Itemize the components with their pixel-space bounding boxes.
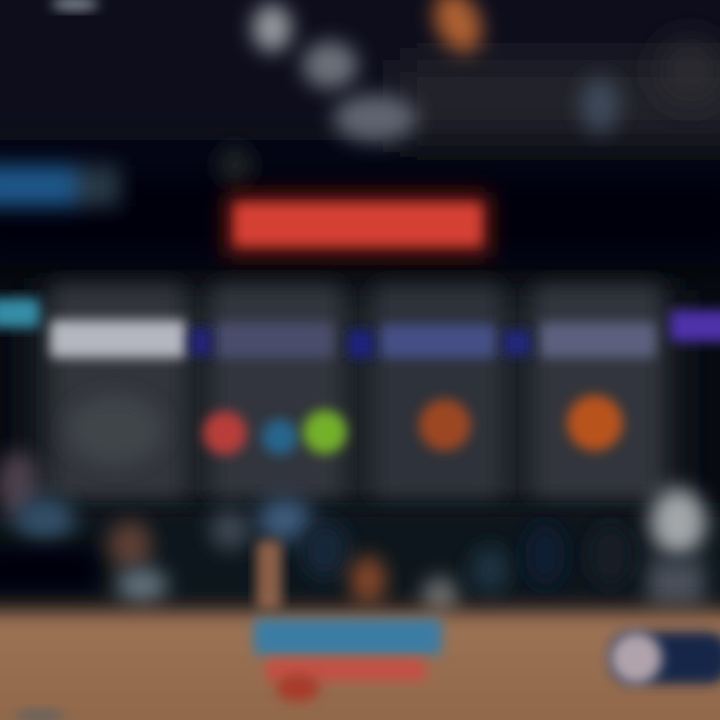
grey stand background <box>30 290 680 510</box>
panel 1 header <box>50 320 186 358</box>
panel 4 <box>534 285 661 500</box>
panel 3 header <box>380 324 496 358</box>
bottom center banner <box>254 619 442 702</box>
panel 2 header <box>216 322 334 358</box>
panel 1 <box>50 285 186 500</box>
panel 4 header <box>540 322 656 358</box>
arena ceiling <box>0 0 720 265</box>
connector strips <box>190 328 531 358</box>
icon: basketball <box>567 395 623 451</box>
wooden floor <box>0 610 720 720</box>
crowd <box>0 451 720 613</box>
icon: blue circle <box>262 419 298 455</box>
left teal tab <box>0 298 40 328</box>
left blue sign <box>0 165 120 207</box>
bottom right badge <box>610 632 720 684</box>
bottom left floor mark <box>14 709 66 720</box>
icon: basketball <box>419 399 471 451</box>
icon: red circle <box>203 411 247 455</box>
right purple tab <box>670 310 720 342</box>
red title banner <box>224 192 492 258</box>
panel 2 <box>203 285 347 500</box>
icon: green circle <box>303 410 347 454</box>
ceiling lights <box>51 0 720 185</box>
orange top accent <box>425 0 491 60</box>
panel 3 <box>374 285 501 500</box>
